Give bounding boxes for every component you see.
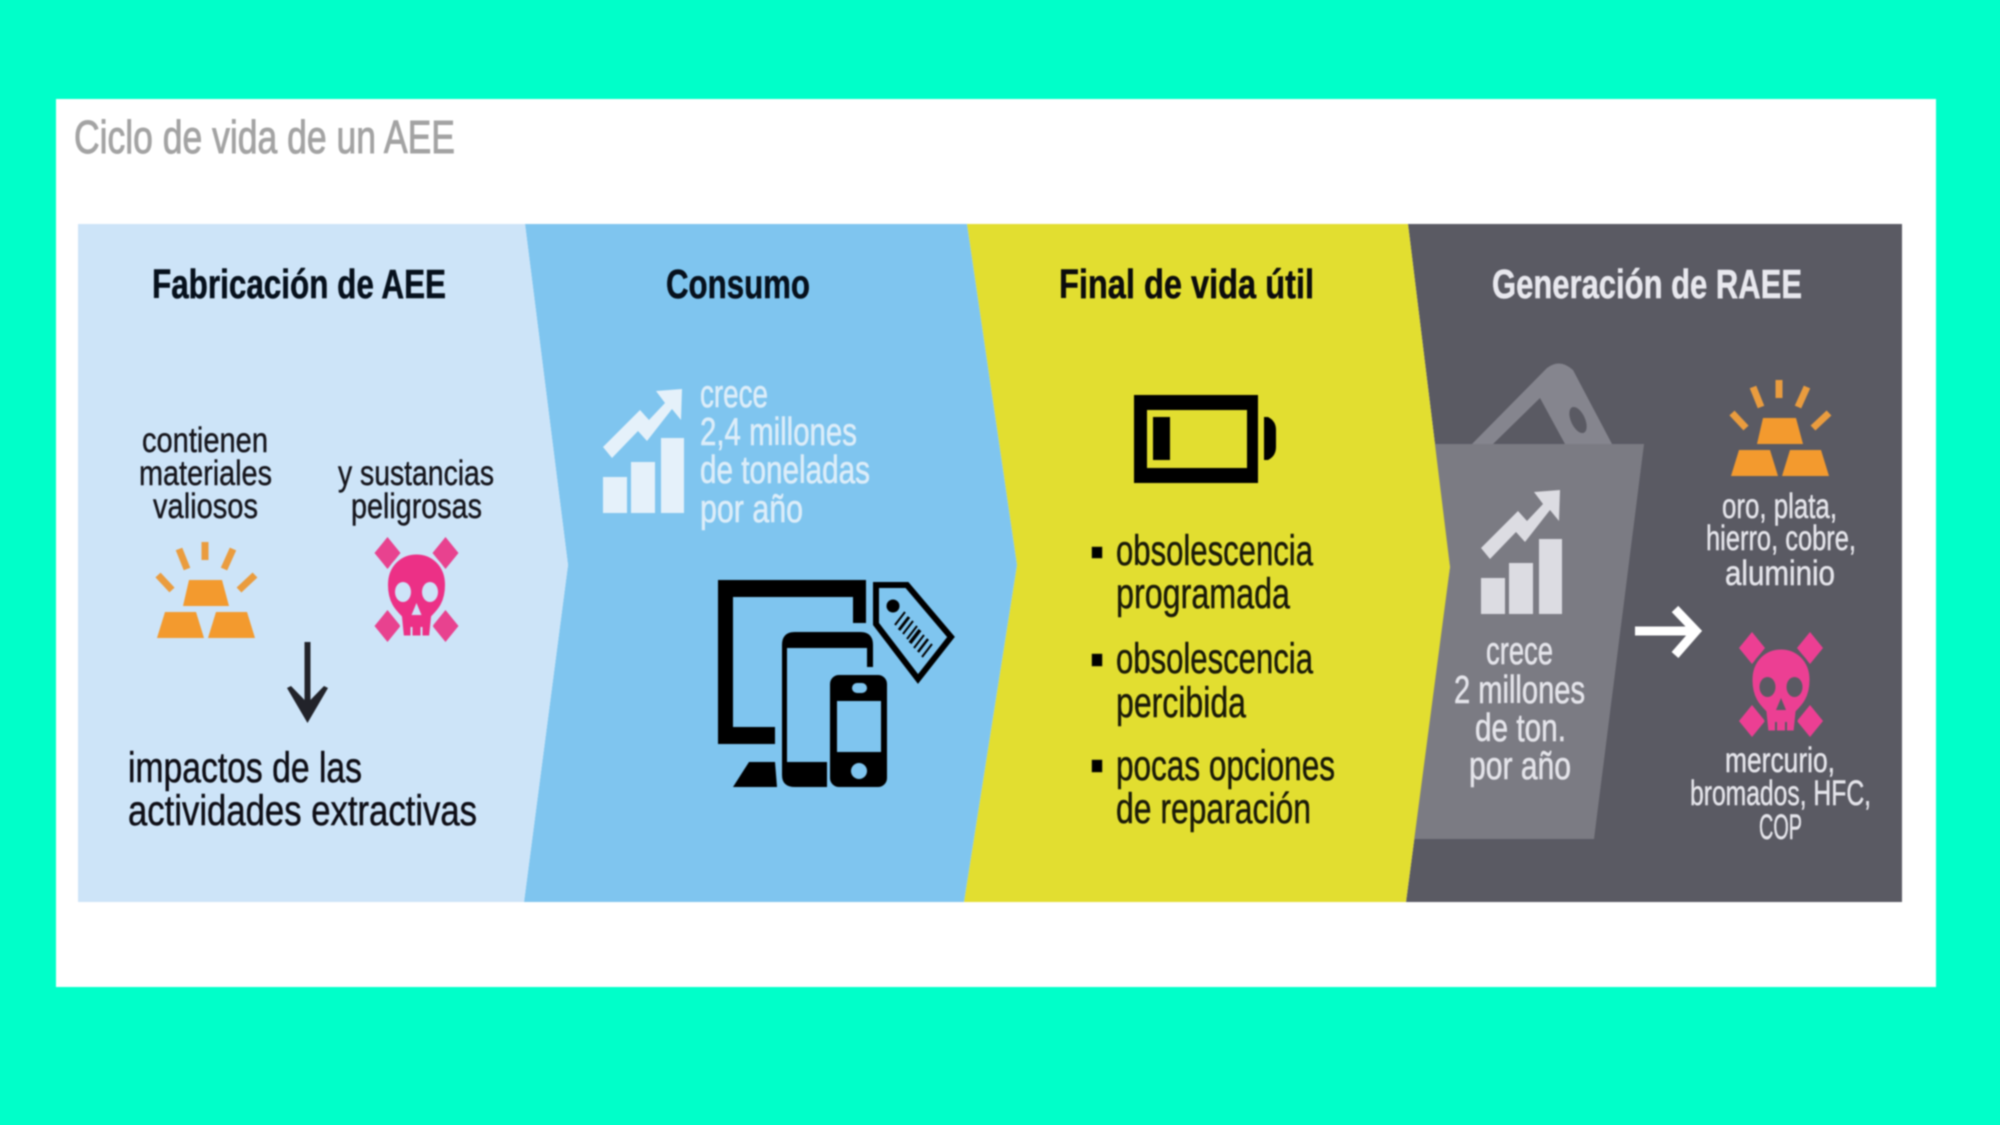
heading: Final de vida útil [1059, 261, 1314, 307]
heading: Consumo [666, 261, 810, 307]
icon: growth chart [1481, 490, 1562, 614]
text: extractive impacts: impactos de las [128, 744, 362, 792]
panel: Consumo [524, 224, 1017, 902]
text: growth of consumption: de toneladas [700, 449, 870, 492]
list: causes: de reparación [1116, 785, 1311, 833]
text: valuable materials: contienen [142, 421, 268, 460]
text: hazardous substances: peligrosas [351, 487, 482, 526]
icon: devices with price tag [718, 580, 951, 787]
text: growth of waste [1454, 630, 1585, 788]
text: hazardous substances [1690, 741, 1871, 847]
icon: phone in bin [1472, 363, 1612, 444]
text: growth of consumption: crece [700, 373, 768, 416]
text: growth of consumption: 2,4 millones [700, 411, 857, 454]
text: valuable materials: aluminio [1725, 554, 1835, 593]
text: growth of waste: 2 millones [1454, 669, 1585, 712]
icon: skull [374, 537, 458, 642]
text: growth of waste: crece [1486, 630, 1553, 673]
text: extractive impacts [128, 744, 477, 835]
text: growth of consumption: por año [700, 488, 803, 531]
panel: Fabricación de AEE [78, 224, 568, 902]
text: growth of waste: de ton. [1475, 707, 1566, 750]
text: valuable materials [139, 421, 272, 526]
text: hazardous substances: COP [1759, 808, 1802, 847]
text: hazardous substances: mercurio, [1725, 741, 1835, 780]
list: causes: obsolescencia [1116, 527, 1313, 575]
icon: gold bars [157, 542, 255, 638]
list: causes: programada [1116, 570, 1290, 618]
list: causes: percibida [1116, 679, 1246, 727]
text: extractive impacts: actividades extractivas [128, 787, 477, 835]
icon: growth chart [603, 389, 684, 513]
list: causes: pocas opciones [1116, 742, 1335, 790]
text: hazardous substances [338, 454, 494, 526]
icon: gold bars [1731, 380, 1829, 476]
arrow: down [287, 642, 328, 723]
heading: Fabricación de AEE [152, 261, 446, 307]
text: hazardous substances: bromados, HFC, [1690, 774, 1871, 813]
panel: Final de vida útil [964, 224, 1450, 902]
list: causes [1092, 527, 1335, 833]
text: growth of consumption [700, 373, 870, 531]
icon: skull [1739, 632, 1823, 737]
heading: Generación de RAEE [1492, 261, 1802, 307]
list: causes: obsolescencia [1116, 635, 1313, 683]
text: growth of waste: por año [1469, 745, 1571, 788]
icon: low battery [1134, 395, 1276, 483]
white card [56, 99, 1936, 987]
panel: Generación de RAEE [1406, 224, 1902, 902]
text: valuable materials [1706, 487, 1856, 593]
icon: waste bin [1408, 444, 1644, 839]
text: valuable materials: oro, plata, [1722, 487, 1837, 526]
text: valuable materials: hierro, cobre, [1706, 519, 1856, 558]
text: valuable materials: valiosos [153, 487, 258, 526]
arrow: to materials [1635, 609, 1696, 655]
text: valuable materials: materiales [139, 454, 272, 493]
title: Ciclo de vida de un AEE [74, 111, 455, 163]
text: hazardous substances: y sustancias [338, 454, 494, 493]
